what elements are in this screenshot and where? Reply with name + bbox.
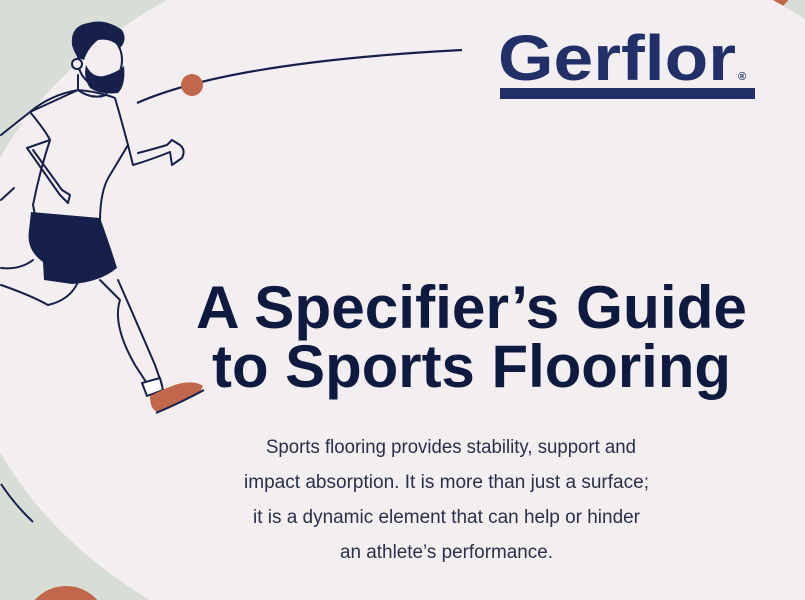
- title: to Sports Flooring: [212, 333, 731, 400]
- neck: [78, 75, 108, 97]
- orange circle bottom left: [35, 586, 97, 600]
- logo: Gerflor: Gerflor: [498, 22, 736, 94]
- front arm: [128, 140, 184, 165]
- title: A Specifier’s Guide: [196, 274, 747, 341]
- runner illustration: [1, 75, 184, 396]
- intro paragraph: an athlete’s performance.: [340, 542, 553, 563]
- intro paragraph: [244, 437, 649, 563]
- back arm: [27, 140, 70, 203]
- head: [72, 22, 125, 93]
- orange dot on arc: [181, 74, 203, 96]
- front leg: [100, 280, 162, 388]
- intro paragraph: it is a dynamic element that can help or hinder: [253, 507, 641, 528]
- shoe: [150, 382, 203, 412]
- intro paragraph: Sports flooring provides stability, support and: [266, 437, 636, 458]
- title: [196, 274, 747, 400]
- orange circle top right: [752, 0, 788, 10]
- decorative arc top: [137, 50, 462, 103]
- shorts: [29, 212, 117, 284]
- logo: Gerflor: ®: [738, 71, 746, 83]
- sock: [142, 378, 163, 396]
- left edge line: [1, 188, 14, 200]
- intro paragraph: impact absorption. It is more than just a surface;: [244, 472, 649, 493]
- arc bottom left: [1, 484, 33, 522]
- torso / shirt: [1, 90, 128, 222]
- back leg: [1, 260, 78, 305]
